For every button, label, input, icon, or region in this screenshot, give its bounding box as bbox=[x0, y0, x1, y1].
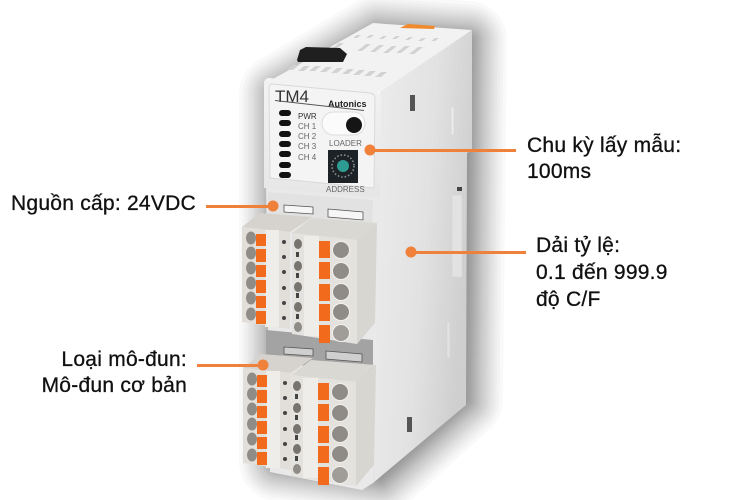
callout: scale range: độ C/F bbox=[536, 288, 601, 311]
callout: scale range: 0.1 đến 999.9 bbox=[536, 261, 668, 284]
lower terminal blocks bbox=[243, 354, 376, 486]
brand name: Autonics bbox=[328, 99, 367, 109]
callout: scale range: Dải tỷ lệ: bbox=[536, 234, 620, 257]
device lower body bbox=[266, 180, 381, 490]
LED labels bbox=[298, 112, 317, 162]
callout: power supply bbox=[11, 192, 278, 215]
callout: sampling cycle bbox=[364, 134, 681, 183]
callout: sampling cycle: Chu kỳ lấy mẫu: bbox=[527, 134, 681, 157]
upper terminal blocks bbox=[242, 213, 377, 344]
device top face bbox=[264, 23, 472, 92]
callout: module type: Loại mô-đun: bbox=[61, 348, 187, 371]
callout: power supply: Nguồn cấp: 24VDC bbox=[11, 192, 196, 215]
LED labels: PWR bbox=[298, 112, 317, 121]
callout: scale range bbox=[406, 234, 668, 311]
product: TM4 temperature controller module bbox=[242, 23, 472, 490]
LED labels: CH 2 bbox=[298, 132, 317, 141]
status LEDs bbox=[279, 110, 291, 178]
callout: module type: Mô-đun cơ bản bbox=[42, 374, 187, 397]
callout: sampling cycle: 100ms bbox=[527, 160, 591, 183]
loader port: LOADER bbox=[329, 139, 362, 148]
top vents bbox=[287, 35, 439, 77]
side vents bbox=[407, 95, 462, 432]
LED labels: CH 1 bbox=[298, 122, 317, 131]
LED labels: CH 3 bbox=[298, 142, 317, 151]
front panel bbox=[264, 78, 381, 198]
callout: module type bbox=[42, 348, 268, 397]
drop shadow bbox=[278, 34, 468, 476]
model name: TM4 bbox=[275, 87, 309, 106]
orange top clip bbox=[400, 24, 435, 29]
address dial: ADDRESS bbox=[326, 185, 365, 194]
LED labels: CH 4 bbox=[298, 153, 317, 162]
recess behind terminals bbox=[266, 192, 373, 372]
device side face bbox=[373, 30, 472, 483]
black DIN clip bbox=[297, 47, 347, 62]
